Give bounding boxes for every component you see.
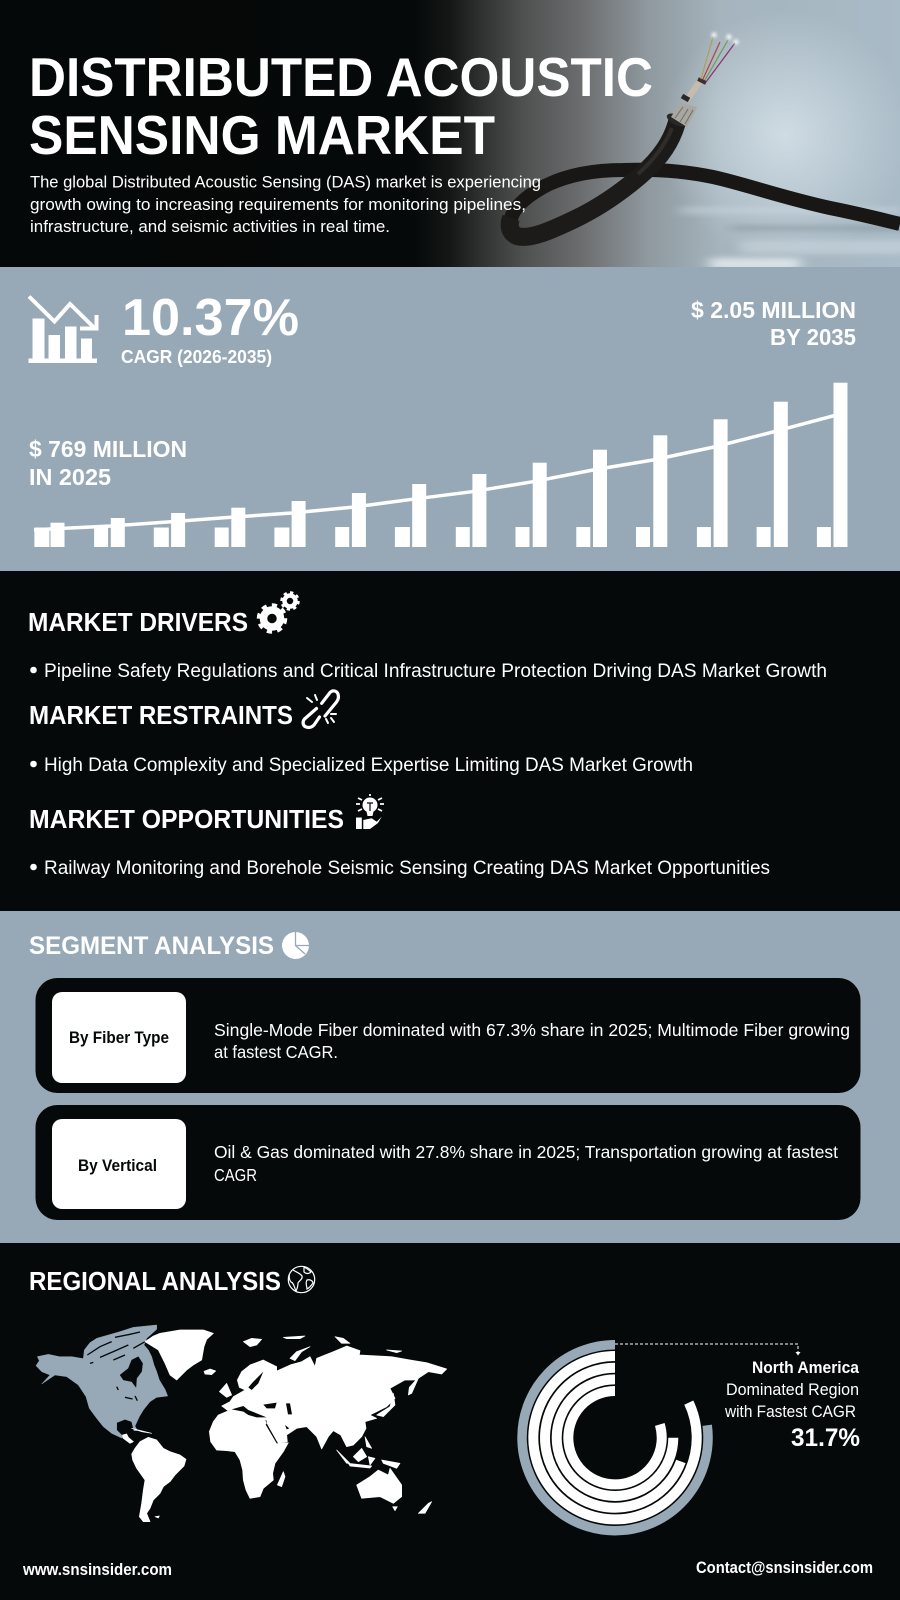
callout: North America: 31.7% — [791, 1424, 860, 1452]
description — [214, 1020, 850, 1062]
continents — [123, 1330, 447, 1522]
2025 market value: $ 769 MILLION — [29, 436, 187, 462]
intro text: The global Distributed Acoustic Sensing (DAS) market is experiencing — [30, 174, 541, 192]
card: by vertical — [36, 1105, 860, 1220]
card: by fiber type — [36, 978, 860, 1093]
cut-outs: inland seas — [232, 1372, 292, 1443]
callout: North America: Dominated Region — [726, 1380, 859, 1399]
world map — [36, 1325, 447, 1522]
description: Oil & Gas dominated with 27.8% share in 2025; Transportation growing at fastest — [214, 1142, 838, 1162]
CAGR value: 10.37% — [122, 289, 299, 347]
intro text — [30, 174, 541, 236]
description: at fastest CAGR. — [214, 1042, 338, 1062]
heading: market opportunities: MARKET OPPORTUNITIES — [29, 806, 344, 834]
icon: broken chain — [303, 691, 338, 727]
callout: North America — [724, 1359, 860, 1452]
2025 market value: IN 2025 — [29, 464, 111, 490]
driver text: Pipeline Safety Regulations and Critical Infrastructure Protection Driving DAS Market Growth — [44, 661, 827, 682]
callout: North America: with Fastest CAGR — [724, 1402, 856, 1421]
icon: globe — [288, 1266, 315, 1293]
radial bar chart — [522, 1345, 708, 1531]
bar chart with growth line — [34, 383, 848, 547]
opportunity text: Railway Monitoring and Borehole Seismic Sensing Creating DAS Market Opportunities — [44, 858, 770, 879]
label chip — [52, 992, 186, 1083]
panel: segment analysis — [0, 911, 900, 1243]
heading: segment analysis: SEGMENT ANALYSIS — [29, 932, 274, 960]
title: DISTRIBUTED ACOUSTIC — [29, 46, 653, 108]
title: SENSING MARKET — [29, 104, 495, 166]
heading: regional analysis: REGIONAL ANALYSIS — [29, 1268, 281, 1296]
description: Single-Mode Fiber dominated with 67.3% share in 2025; Multimode Fiber growing — [214, 1020, 850, 1040]
cut-outs: Hudson Bay, Arctic channels and lakes — [87, 1332, 145, 1401]
label chip — [52, 1119, 186, 1209]
icon: gears — [258, 592, 298, 632]
title — [29, 46, 653, 166]
icon: chart with trend arrow — [28, 296, 97, 363]
icon: hand holding light bulb — [356, 794, 384, 829]
panel: market dynamics — [0, 571, 900, 911]
2035 market value — [691, 297, 856, 350]
2035 market value: $ 2.05 MILLION — [691, 297, 856, 323]
intro text: growth owing to increasing requirements for monitoring pipelines, — [30, 196, 526, 214]
description — [214, 1142, 838, 1185]
panel: market size and CAGR — [0, 267, 900, 571]
region: North America highlighted — [36, 1325, 168, 1438]
footer: contact: Contact@snsinsider.com — [696, 1559, 873, 1577]
footer: website: www.snsinsider.com — [22, 1561, 172, 1579]
heading: market restraints: MARKET RESTRAINTS — [29, 702, 293, 730]
icon: pie chart — [282, 932, 309, 959]
2025 market value — [29, 436, 187, 490]
image: fibre optic cable — [510, 32, 900, 237]
2035 market value: BY 2035 — [770, 324, 856, 350]
description: CAGR — [214, 1165, 257, 1185]
restraint text: High Data Complexity and Specialized Expertise Limiting DAS Market Growth — [44, 755, 693, 776]
panel: header — [0, 0, 900, 270]
heading: market drivers: MARKET DRIVERS — [28, 609, 248, 637]
label chip: By Fiber Type — [69, 1029, 169, 1047]
intro text: infrastructure, and seismic activities in real time. — [30, 218, 390, 236]
panel: regional analysis — [29, 1266, 860, 1531]
header background photo — [434, 0, 900, 267]
CAGR label: CAGR (2026-2035) — [121, 347, 272, 367]
leader arrow — [615, 1344, 800, 1356]
callout: North America: North America — [752, 1359, 860, 1377]
label chip: By Vertical — [78, 1157, 157, 1175]
